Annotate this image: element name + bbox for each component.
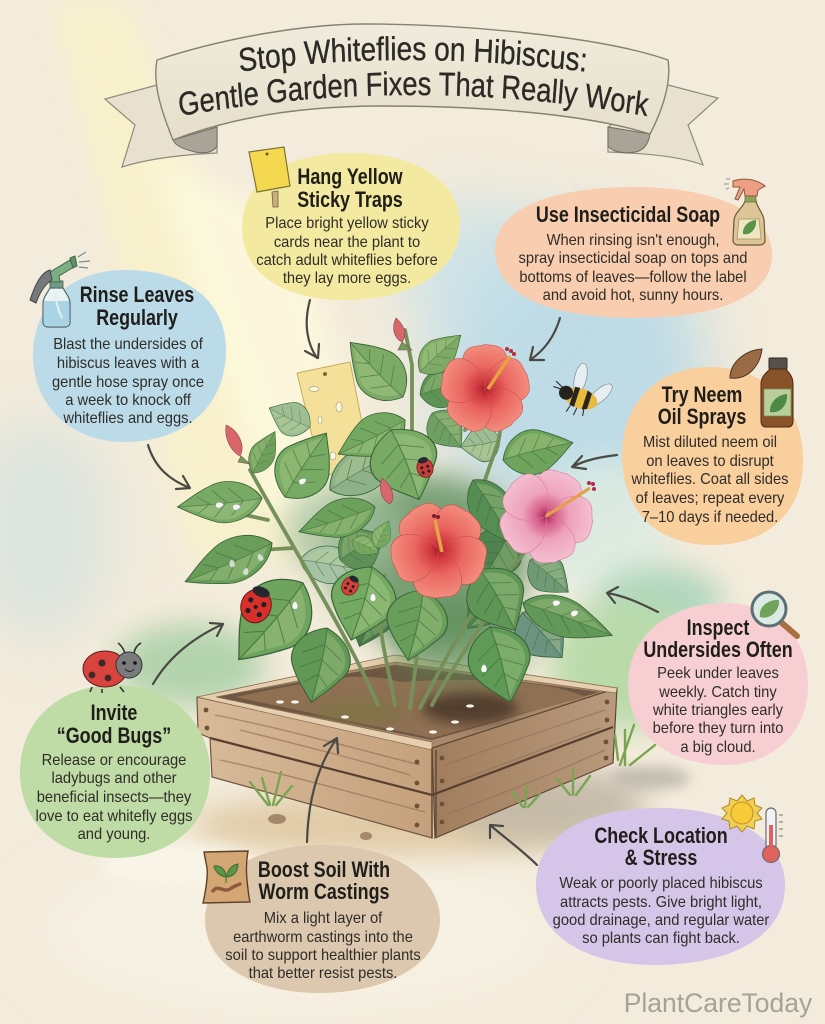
hibiscus plant [175,318,619,710]
heading: neem: Try Neem [662,383,742,407]
body: location: so plants can fight back. [582,929,740,947]
body: rinse: a week to knock off [65,391,192,409]
stamen centre flower [432,514,442,552]
body: rinse: hibiscus leaves with a [57,354,200,372]
arrow: inspect [607,587,658,612]
body: sticky traps [256,214,438,287]
icon: soil bag [203,851,250,903]
arrows [148,300,658,865]
body: neem: on leaves to disrupt [646,452,774,470]
title text line 2: Gentle Garden Fixes That Really Work [179,71,650,116]
body: neem [631,433,789,526]
body: rinse: whiteflies and eggs. [62,409,193,427]
foliage mass behind plant [285,475,530,680]
icon: magnifying glass [752,592,797,636]
panel: yellow sticky traps [242,153,460,300]
body: inspect: a big cloud. [680,738,756,756]
banner right tail [608,85,718,165]
title banner [104,23,720,168]
ladybug small upper leaf [414,455,435,479]
arrow: rinse [148,445,190,489]
body: worm castings: Mix a light layer of [264,909,383,927]
heading: location [594,824,728,870]
body: location: good drainage, and regular water [553,911,769,929]
body: rinse [52,335,204,427]
body: location: Weak or poorly placed hibiscus [559,874,763,892]
heading: location: & Stress [625,846,697,870]
background leaves [262,364,582,675]
body: neem: of leaves; repeat every [636,489,785,507]
body: soap: spray insecticidal soap on tops and [519,249,747,267]
stamen pink flower [546,481,596,516]
heading: inspect: Inspect [687,616,750,640]
heading: inspect: Undersides Often [643,638,793,662]
body: inspect: before they turn into [653,719,783,737]
body: inspect: white triangles early [652,701,783,719]
heading: good bugs: “Good Bugs” [57,724,171,748]
icon: cartoon ladybug [83,643,142,693]
heading: good bugs [57,701,171,748]
arrow: soap [530,318,560,360]
heading: sticky traps [297,165,403,212]
body: good bugs: beneficial insects—they [37,788,192,806]
arrow: worm castings [307,738,338,842]
banner left fold [173,127,217,153]
body: neem: 7–10 days if needed. [642,508,778,526]
heading: good bugs: Invite [91,701,137,725]
body: inspect: Peek under leaves [657,664,779,682]
heading: neem: Oil Sprays [658,405,746,429]
body: neem: Mist diluted neem oil [643,433,777,451]
panel: check location [536,808,785,965]
icon: yellow sticky card [249,147,290,207]
body: good bugs: love to eat whitefly eggs [36,807,193,825]
body: inspect: weekly. Catch tiny [658,683,777,701]
panel: inspect undersides [628,603,808,765]
body: rinse: Blast the undersides of [53,335,204,353]
banner left tail [105,85,217,167]
body: soap [519,231,747,304]
body: good bugs: Release or encourage [42,751,186,769]
ladybug small centre leaf [338,572,362,598]
icon: bumblebee [547,356,620,425]
panel: good bugs [20,685,210,858]
body: sticky traps: catch adult whiteflies before [256,251,438,269]
body: worm castings: that better resist pests. [249,964,397,982]
body: soap: bottoms of leaves—follow the label [519,268,747,286]
heading: worm castings: Worm Castings [258,880,390,904]
body: neem: whiteflies. Coat all sides [631,470,789,488]
body: worm castings [225,909,421,982]
body: soap: and avoid hot, sunny hours. [543,286,723,304]
body: sticky traps: they lay more eggs. [283,269,411,287]
arrow: good bugs [153,623,223,684]
foreground leaves [175,323,619,710]
arrow: neem [572,455,617,469]
body: sticky traps: cards near the plant to [274,233,420,251]
arrow: location [490,825,537,865]
body: location: attracts pests. Give bright light, [560,893,762,911]
heading: inspect [643,616,793,662]
body: location [553,874,769,947]
heading: neem [658,383,746,429]
body: good bugs: and young. [78,825,150,843]
banner right fold [608,127,650,153]
watermark: PlantCareToday [624,988,813,1018]
body: rinse: gentle hose spray once [52,373,204,391]
body: good bugs: ladybugs and other [51,769,177,787]
raised wooden planter [197,655,617,838]
body: sticky traps: Place bright yellow sticky [265,214,429,232]
pebbles on ground [268,814,372,840]
stems [200,330,535,708]
red hibiscus flower upper [432,339,539,443]
heading: soap: Use Insecticidal Soap [536,203,720,227]
heading: sticky traps: Hang Yellow [297,165,403,189]
icon: sun and thermometer [722,795,783,862]
body: inspect [652,664,783,756]
arrow: sticky trap [305,300,319,358]
heading: rinse [80,283,194,330]
buds [226,318,412,504]
body: soap: When rinsing isn't enough, [547,231,719,249]
panel: insecticidal soap [495,187,772,318]
grass tufts [250,725,655,807]
icon: hose nozzle and spray bottle [30,252,90,327]
yellow sticky trap on plant [297,362,370,477]
body: worm castings: earthworm castings into the [233,928,413,946]
body: good bugs [36,751,193,843]
stamen upper flower [488,347,516,389]
banner main body [156,24,669,140]
panel: rinse leaves [33,270,226,442]
heading: worm castings [258,858,390,904]
icon: soap spray bottle [724,179,765,245]
panel: worm castings [205,845,440,993]
icon: neem seed and bottle [730,349,793,427]
pink hibiscus flower [475,448,616,588]
title text line 1: Stop Whiteflies on Hibiscus: [240,36,586,74]
heading: worm castings: Boost Soil With [258,858,390,882]
heading: rinse: Rinse Leaves [80,283,194,307]
red hibiscus flower centre [381,489,500,609]
heading: location: Check Location [594,824,728,848]
ladybug large on leaf [236,582,277,627]
heading: rinse: Regularly [96,306,179,330]
heading: sticky traps: Sticky Traps [297,188,403,212]
panel: neem oil [622,367,803,545]
body: worm castings: soil to support healthier plants [225,946,421,964]
whiteflies on leaves [215,477,580,672]
